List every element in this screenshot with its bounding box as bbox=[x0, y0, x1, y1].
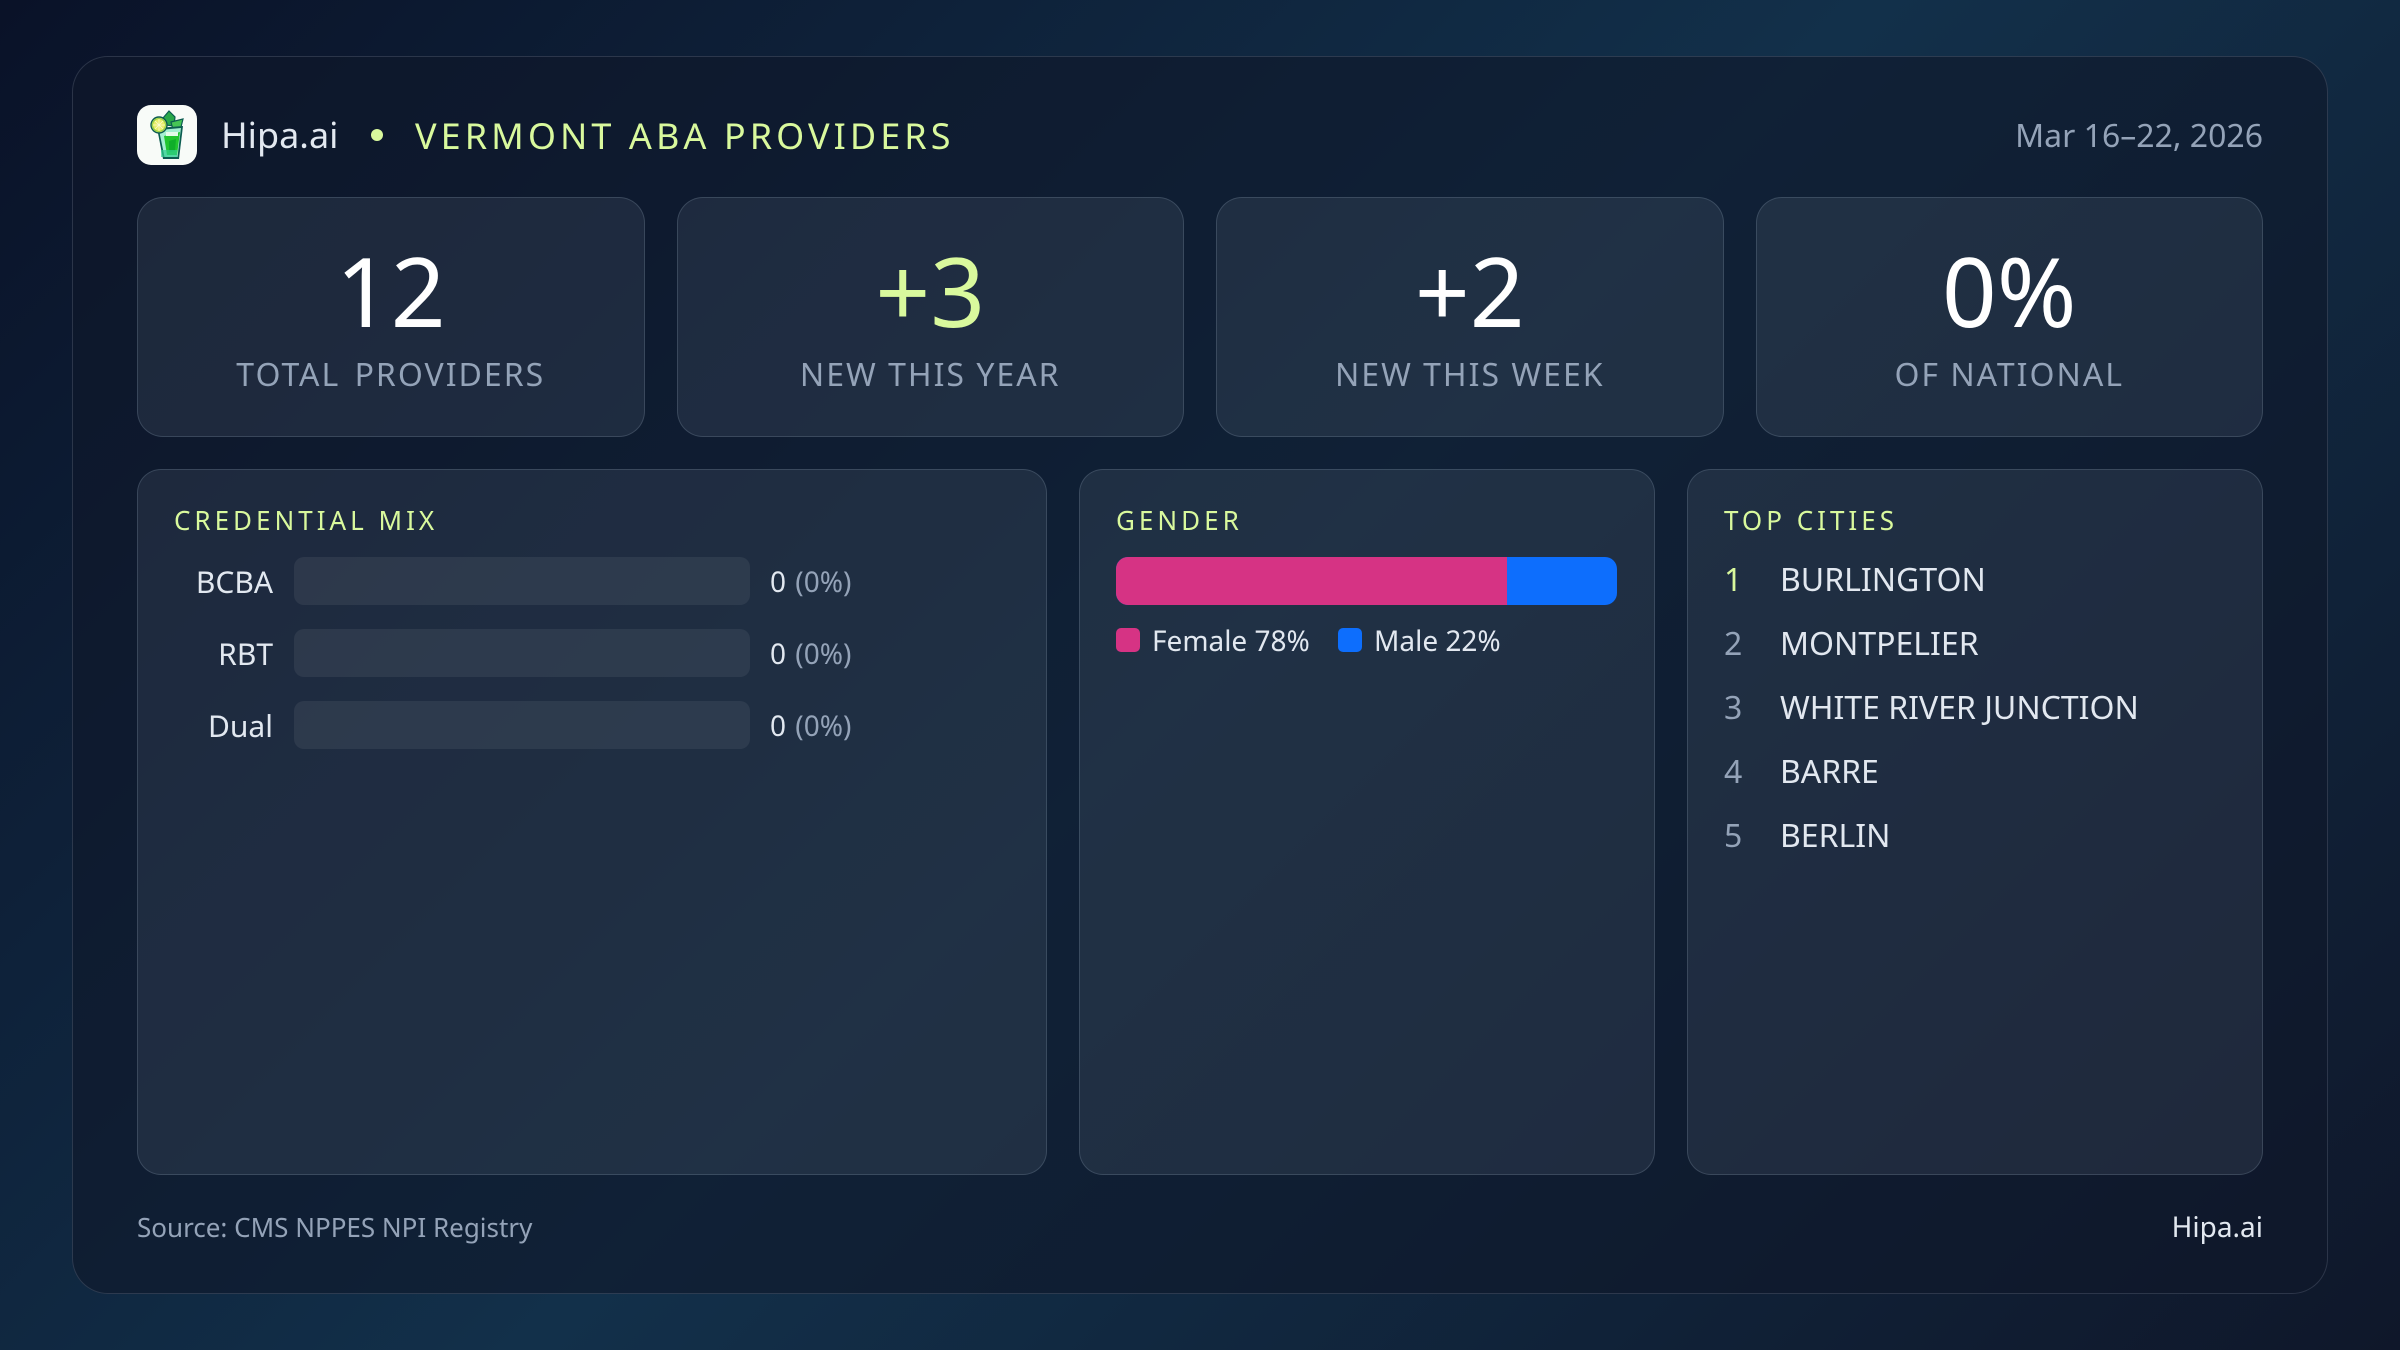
city 3: WHITE RIVER JUNCTION bbox=[1780, 686, 2139, 729]
date range: Mar 16–22, 2026 bbox=[2015, 114, 2263, 157]
value: 0 (0%) bbox=[770, 707, 851, 745]
value: 0 (0%) bbox=[770, 635, 851, 673]
city list bbox=[1724, 558, 2139, 857]
stat card: new this week bbox=[1216, 197, 1724, 437]
bar row: Dual bbox=[208, 701, 851, 749]
rank 4: 4 bbox=[1724, 750, 1742, 793]
rank 2: 2 bbox=[1724, 622, 1742, 665]
female segment bbox=[1116, 557, 1507, 605]
panel: top cities bbox=[1687, 469, 2263, 1175]
track bbox=[294, 629, 750, 677]
panel: credential mix bbox=[137, 469, 1047, 1175]
label: NEW THIS WEEK bbox=[1335, 353, 1605, 396]
city 2: MONTPELIER bbox=[1780, 622, 1979, 665]
stat card: total providers bbox=[137, 197, 644, 437]
bar row: BCBA bbox=[196, 557, 851, 605]
label: NEW THIS YEAR bbox=[800, 353, 1061, 396]
label: BCBA bbox=[196, 561, 273, 602]
rank 5: 5 bbox=[1724, 814, 1742, 857]
city 4: BARRE bbox=[1780, 750, 1879, 793]
value: +2 bbox=[1415, 225, 1525, 356]
icon: mojito glass logo bbox=[137, 105, 197, 165]
city 1: BURLINGTON bbox=[1780, 558, 1986, 601]
brand name: Hipa.ai bbox=[221, 110, 338, 159]
separator dot bbox=[371, 129, 383, 141]
label: RBT bbox=[218, 633, 273, 674]
stat card: of national bbox=[1756, 197, 2263, 437]
value: +3 bbox=[875, 225, 985, 356]
city 5: BERLIN bbox=[1780, 814, 1890, 857]
legend bbox=[1116, 622, 1501, 660]
header bbox=[137, 105, 2263, 165]
gender heading: GENDER bbox=[1116, 502, 1243, 538]
footer source: Source: CMS NPPES NPI Registry bbox=[137, 1209, 532, 1245]
swatch: female bbox=[1116, 628, 1140, 652]
track bbox=[294, 557, 750, 605]
value: 12 bbox=[336, 225, 446, 356]
label: OF NATIONAL bbox=[1894, 353, 2124, 396]
stacked bar: gender split bbox=[1116, 557, 1617, 605]
swatch: male bbox=[1338, 628, 1362, 652]
label: Dual bbox=[208, 705, 273, 746]
stat card: new this year bbox=[676, 197, 1184, 437]
report title: VERMONT ABA PROVIDERS bbox=[415, 111, 955, 160]
label: female: Female 78% bbox=[1152, 622, 1310, 660]
top cities heading: TOP CITIES bbox=[1724, 502, 1898, 538]
rank 1: 1 bbox=[1724, 558, 1742, 601]
bar row: RBT bbox=[218, 629, 851, 677]
value: 0 (0%) bbox=[770, 563, 851, 601]
track bbox=[294, 701, 750, 749]
footer brand: Hipa.ai bbox=[2172, 1208, 2263, 1246]
rank 3: 3 bbox=[1724, 686, 1742, 729]
label: male: Male 22% bbox=[1374, 622, 1501, 660]
panel: gender bbox=[1079, 469, 1655, 1175]
value: 0% bbox=[1942, 225, 2077, 356]
credential mix heading: CREDENTIAL MIX bbox=[174, 502, 438, 538]
label: TOTAL PROVIDERS bbox=[236, 353, 545, 396]
